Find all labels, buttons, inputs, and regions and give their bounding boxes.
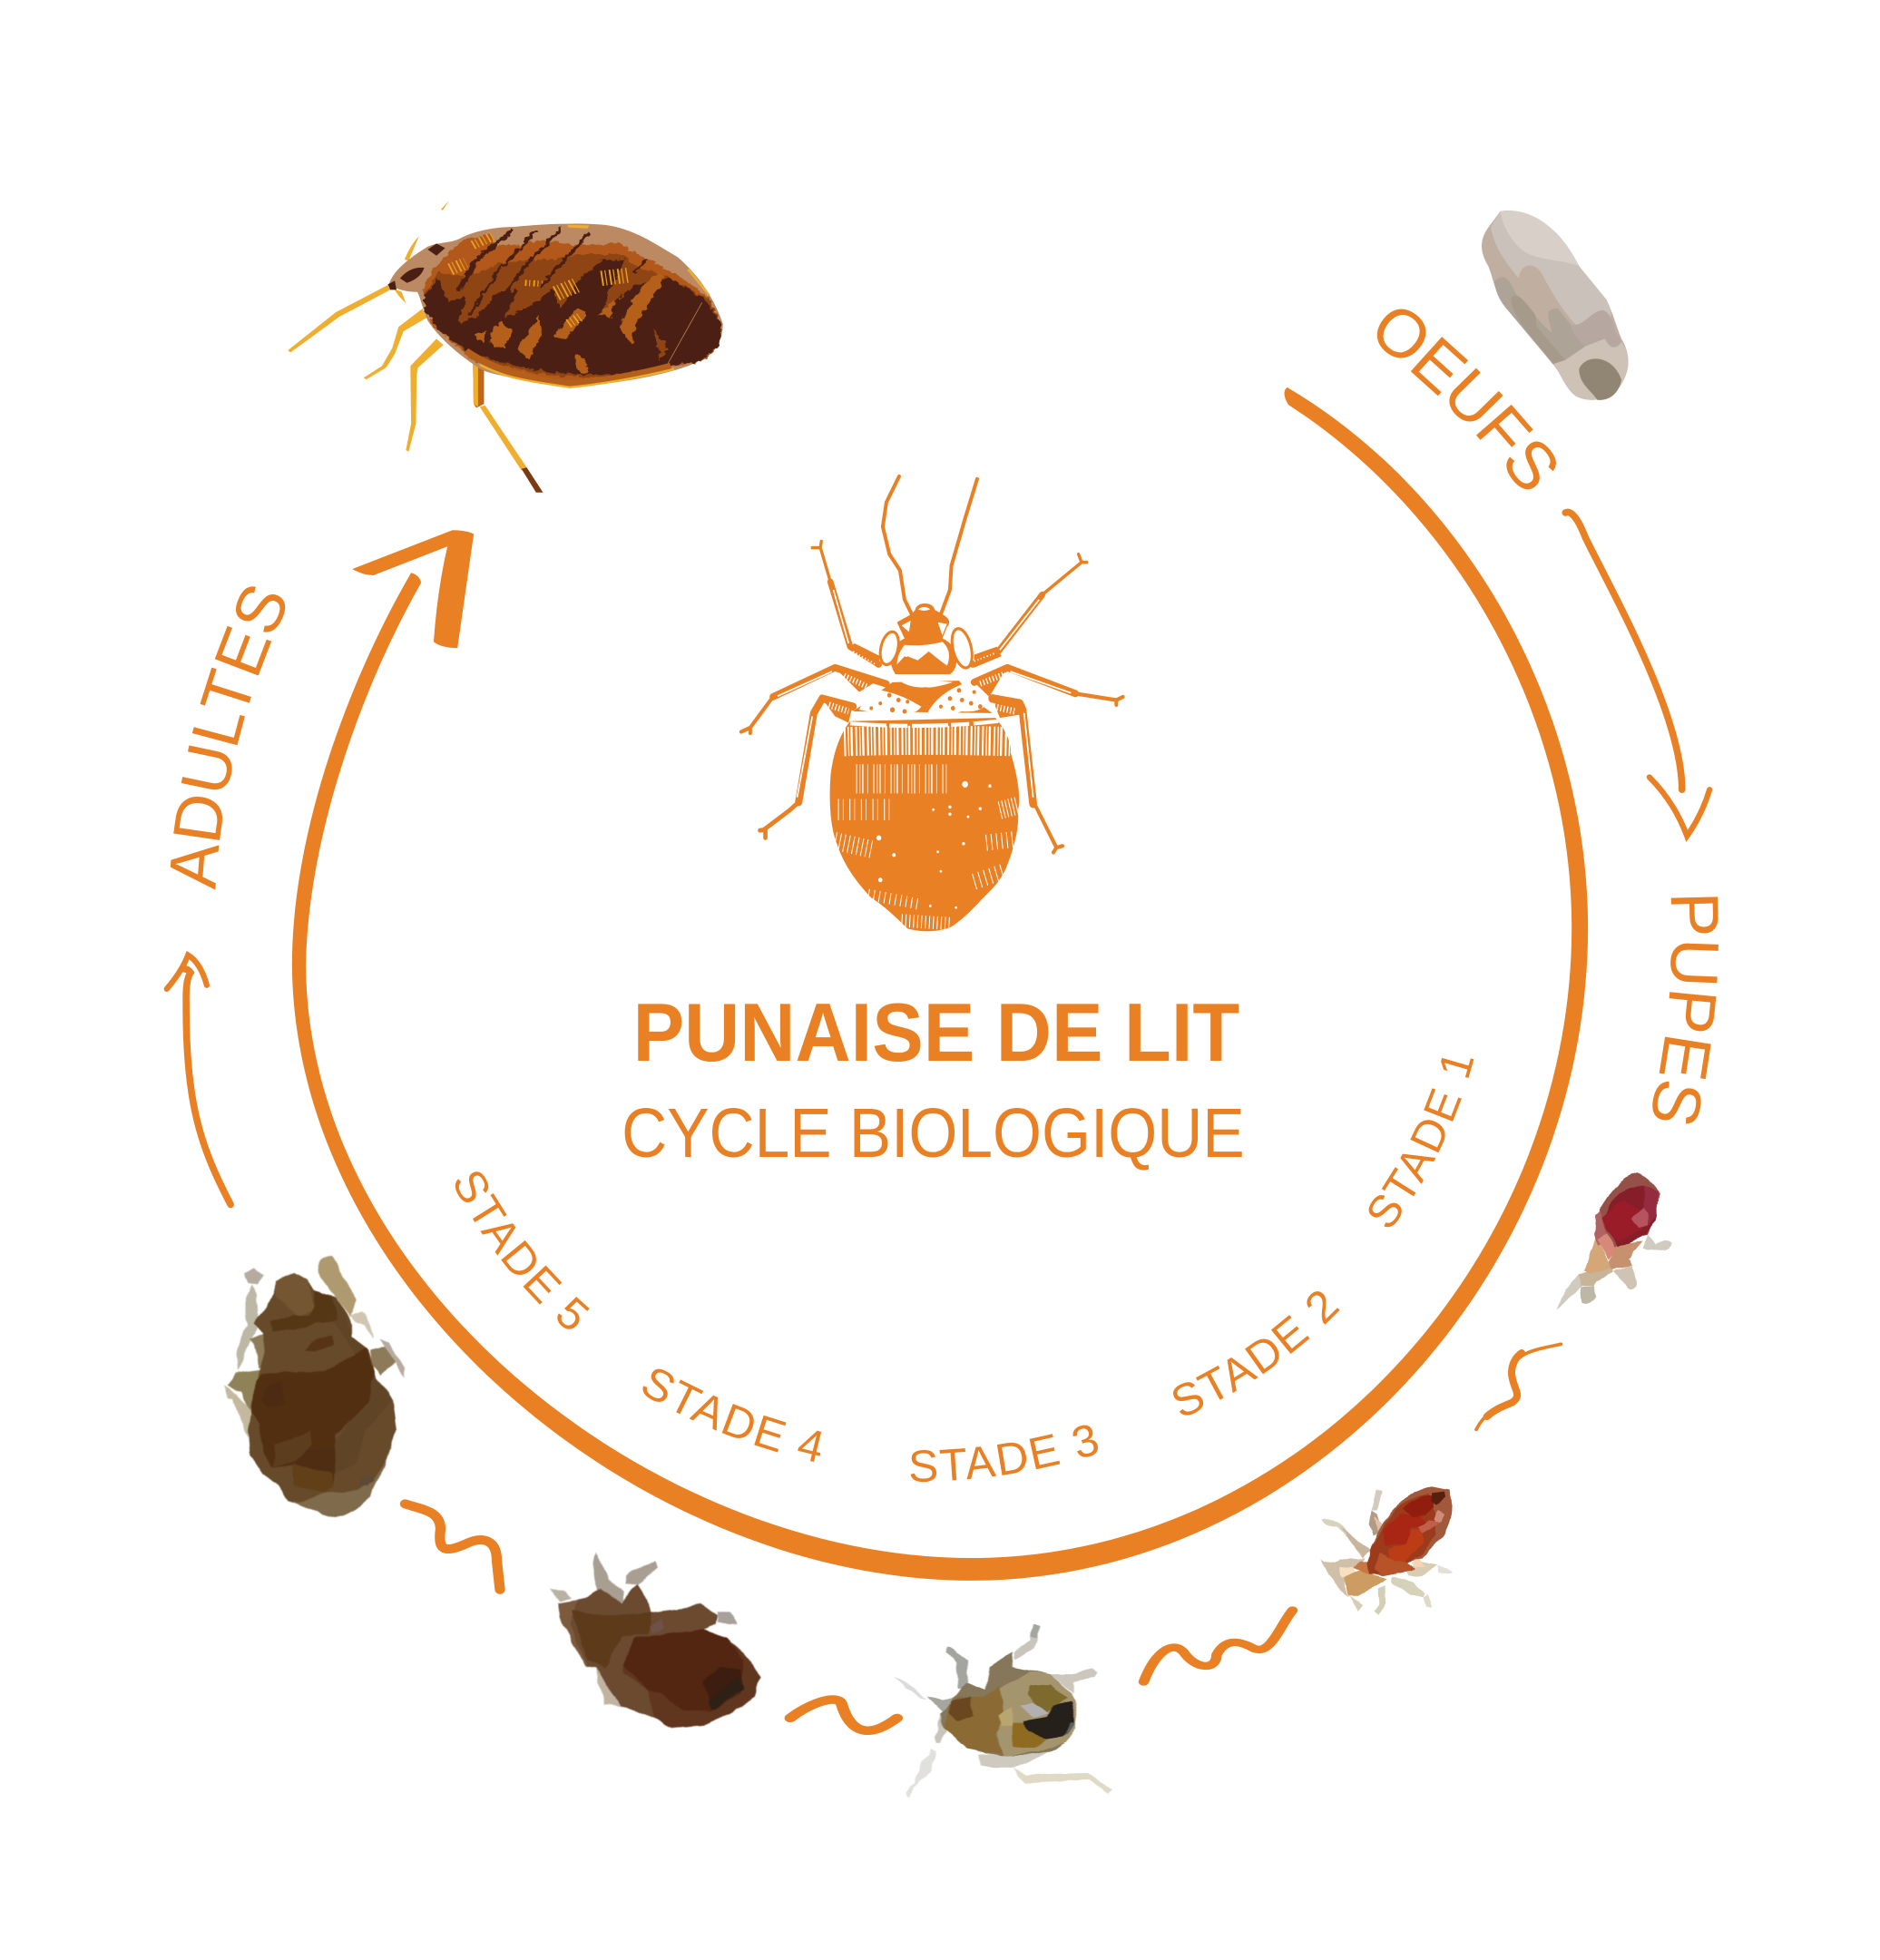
photo: stade 1 nymph — [1556, 1173, 1671, 1310]
title: PUNAISE DE LIT — [633, 986, 1239, 1079]
arrow: stade 5 to adultes — [167, 956, 230, 1204]
label: stade 2: STADE 2 — [1173, 1291, 1339, 1416]
photo: egg — [1482, 211, 1629, 400]
label: pupes: PUPES — [1652, 897, 1718, 1123]
adult legs — [288, 201, 526, 470]
subtitle: CYCLE BIOLOGIQUE — [622, 1094, 1245, 1172]
photo: stade 5 nymph — [223, 1256, 405, 1517]
photo: stade 4 nymph — [550, 1552, 760, 1729]
photo: stade 3 nymph — [895, 1623, 1112, 1798]
bug legs and antennae — [741, 476, 1123, 852]
arrow: oeufs to pupes — [1565, 512, 1709, 836]
arrow: squiggle stade 1 to pupes — [1476, 1344, 1561, 1429]
bug abdomen — [830, 718, 1019, 931]
label: stade 1: STADE 1 — [1368, 1058, 1474, 1227]
arrowhead of main cycle — [352, 530, 474, 648]
label: stade 5: STADE 5 — [455, 1171, 590, 1329]
label: stade 4: STADE 4 — [642, 1368, 822, 1462]
main cycle arrow — [292, 387, 1588, 1581]
photo: stade 2 nymph — [1320, 1487, 1453, 1615]
arrow: squiggle stade 4 to stade 3 — [405, 1504, 500, 1590]
label: adultes: ADULTES — [171, 586, 285, 890]
bug wing pads — [859, 681, 988, 717]
label: stade 3: STADE 3 — [911, 1425, 1098, 1483]
adult head — [400, 268, 425, 283]
adult body — [389, 224, 723, 387]
adult rim highlights — [466, 351, 671, 384]
arrow: squiggle stade 3 to stade 2 — [790, 1700, 897, 1730]
icon: engraved bed bug — [741, 476, 1123, 931]
bug head and thorax — [853, 603, 993, 713]
label: oeufs: OEUFS — [1377, 309, 1556, 490]
photo: adult bed bug — [288, 201, 723, 493]
bug abdomen hatching — [835, 721, 1018, 924]
arrow: squiggle stade 2 to stade 1 — [1144, 1611, 1292, 1681]
adult body highlights — [473, 272, 667, 372]
